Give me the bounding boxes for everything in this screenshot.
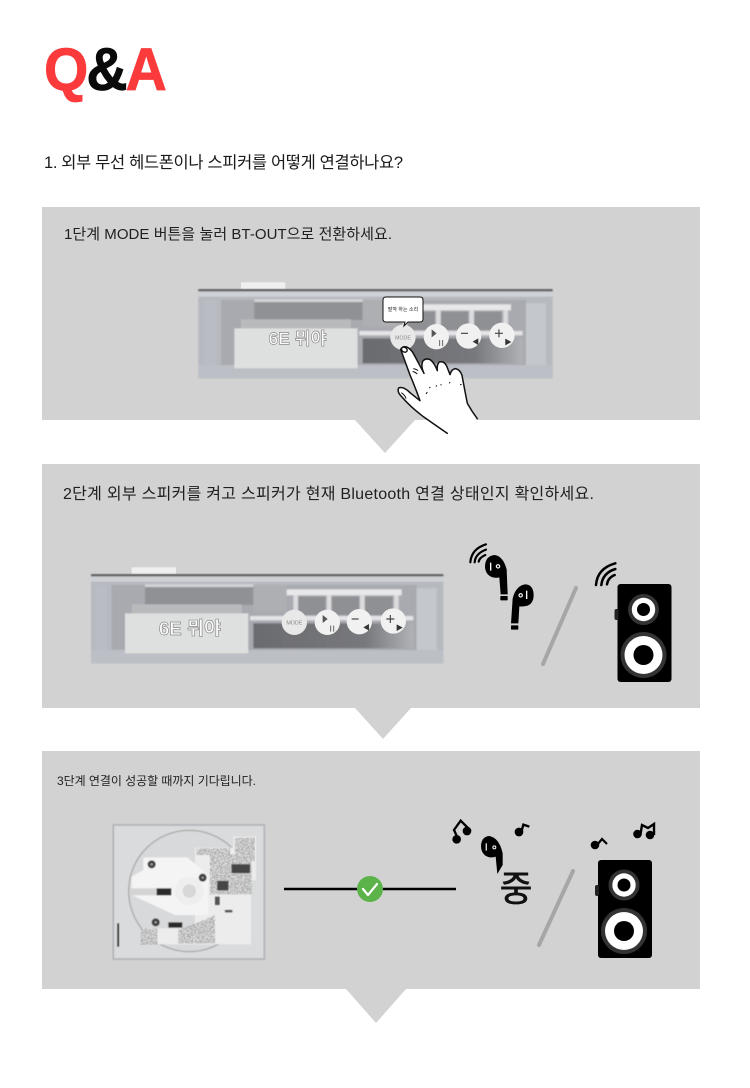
icon: signal waves	[596, 563, 615, 585]
label text: 6E 뮈야	[159, 618, 221, 639]
label plate	[125, 604, 248, 653]
panel: step 3	[42, 751, 700, 1023]
step 2 text: 2단계 외부 스피커를 켜고 스피커가 현재 Bluetooth 연결 상태인지 확인하세요.	[63, 485, 594, 503]
label plate	[234, 319, 358, 368]
panel 2 background	[42, 464, 700, 739]
buttons	[390, 323, 515, 350]
circuit board speckle	[141, 838, 255, 945]
panel 1 background	[42, 207, 700, 453]
buttons: MODE	[395, 335, 411, 341]
label text: 6E 뮈야	[269, 329, 327, 349]
buttons	[282, 608, 406, 635]
question heading: 1. 외부 무선 헤드폰이나 스피커를 어떻게 연결하나요?	[44, 153, 403, 172]
icon: green check	[357, 876, 383, 902]
device: top view with disc	[113, 825, 264, 959]
icon: speaker with music notes	[591, 824, 654, 958]
speech bubble: 딸깍 하는 소리	[388, 306, 418, 313]
step 3 text: 3단계 연결이 성공할 때까지 기다립니다.	[57, 774, 256, 788]
panel: step 2	[42, 464, 700, 739]
title: Q&A	[44, 37, 166, 103]
divider slash	[539, 871, 573, 945]
icon: pointing hand	[398, 346, 477, 433]
icon: music notes and earbud	[452, 821, 529, 874]
panel: step 1	[42, 207, 700, 453]
connection line	[284, 888, 456, 890]
circuit chips	[117, 864, 250, 947]
speech bubble	[383, 297, 423, 326]
buttons: MODE	[286, 620, 303, 626]
panel 3 background	[42, 751, 700, 1023]
icon: wireless earbuds with signal	[470, 544, 534, 630]
device: front view with mode button	[198, 282, 553, 378]
step 1 text: 1단계 MODE 버튼을 눌러 BT-OUT으로 전환하세요.	[64, 226, 392, 243]
icon: speaker	[614, 584, 672, 682]
device: front view	[91, 567, 443, 663]
status text: 중: 중	[499, 868, 533, 909]
divider slash	[543, 588, 576, 664]
